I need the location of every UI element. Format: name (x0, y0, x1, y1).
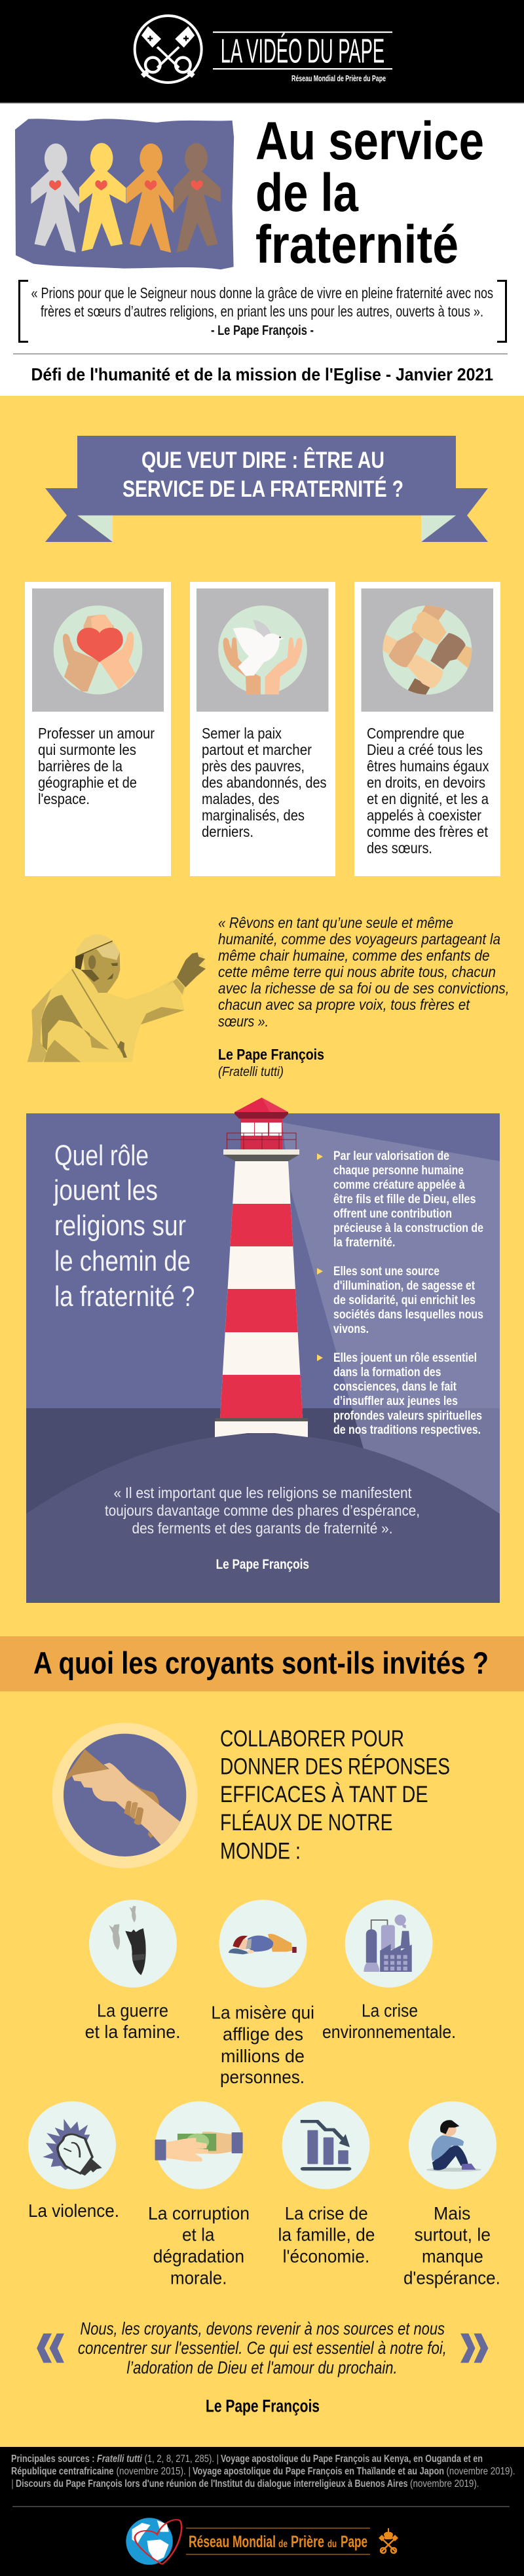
bullet three: Elles jouent un rôle essentiel (333, 1351, 477, 1365)
label: l'économie. (283, 2246, 369, 2266)
card text: partout et marcher (202, 741, 312, 758)
card text (367, 725, 489, 856)
section heading band (0, 1636, 524, 1691)
collaborate heading: COLLABORER POUR (220, 1726, 404, 1752)
icon: sleeping person (229, 1934, 297, 1954)
collaborate heading: FLÉAUX DE NOTRE (220, 1810, 393, 1836)
label (148, 2203, 250, 2288)
icon: money exchange (155, 2132, 243, 2161)
sources: (1, 2, 8, 271, 285). | (144, 2453, 219, 2465)
Pope quote: Le Pape François (218, 1046, 324, 1063)
card text: derniers. (202, 823, 253, 840)
card text: Comprendre que (367, 725, 464, 742)
Pope quote (218, 914, 510, 1079)
icon: bombs (109, 1906, 146, 1975)
icon: fist (43, 2119, 102, 2176)
title: fraternité (255, 215, 458, 275)
Pope quote: cette même terre qui nous abrite tous, chacun (218, 963, 496, 980)
bullet two: d'illumination, de sagesse et (333, 1279, 476, 1293)
card text: êtres humains égaux (367, 758, 489, 775)
card text (38, 725, 155, 807)
card text: des abandonnés, des (202, 774, 326, 791)
Pope quote: sœurs ». (218, 1013, 269, 1030)
bullet three: consciences, dans le fait (333, 1380, 457, 1394)
network name: Réseau Mondial (189, 2533, 276, 2551)
quote text (78, 2318, 447, 2377)
icon: factory (364, 1915, 412, 1972)
label: La crise (362, 2001, 418, 2021)
panel quote: « Il est important que les religions se manifestent (114, 1484, 412, 1501)
panel: card peace (190, 582, 335, 876)
label: manque (422, 2246, 483, 2266)
label: La guerre (97, 2001, 168, 2021)
label: dégradation (153, 2246, 244, 2266)
card text: comme des frères et (367, 823, 489, 840)
label: La violence. (28, 2201, 119, 2221)
sources: République centrafricaine (11, 2466, 114, 2477)
panel: card equality (354, 582, 500, 876)
card text: barrières de la (38, 758, 122, 775)
card text: et en dignité, et les a (367, 790, 489, 807)
prayer quote in brackets (20, 280, 506, 342)
Pope quote: même chair humaine, comme des enfants de (218, 947, 490, 964)
collaborate heading: MONDE : (220, 1839, 301, 1864)
quote text: concentrer sur l'essentiel. Ce qui est essentiel à notre foi, (78, 2338, 447, 2358)
label: et la (182, 2224, 215, 2244)
icon: quote chevrons (37, 2334, 488, 2363)
icon: hands with heart (54, 606, 142, 695)
label: surtout, le (415, 2224, 491, 2244)
bullet one: être fils et fille de Dieu, elles (333, 1193, 476, 1206)
sources: Voyage apostolique du Pape François en Thaïlande et au Japon (193, 2466, 444, 2477)
panel quote: toujours davantage comme des phares d’espérance, (105, 1502, 420, 1519)
title: de la (255, 163, 359, 223)
label: et la famine. (85, 2022, 181, 2042)
collaborate heading (220, 1726, 450, 1864)
logo wordmark: LA VIDÉO DU PAPE (221, 33, 384, 71)
network name: Pape (341, 2533, 367, 2551)
heading: role of religions: le chemin de (54, 1245, 191, 1277)
panel: card love (25, 582, 171, 876)
sources: Discours du Pape François lors d'une réunion de l'Institut du dialogue interreligieux à Buenos Aires (16, 2478, 408, 2489)
Pope quote: « Rêvons en tant qu’une seule et même (218, 914, 453, 931)
icon: falling chart (301, 2121, 351, 2170)
footer (0, 2447, 524, 2576)
label: afflige des (223, 2024, 303, 2045)
header band (0, 0, 524, 104)
panel quote: Le Pape François (216, 1557, 309, 1572)
panel: lighthouse (26, 1098, 500, 1603)
item: environmental crisis (322, 1900, 456, 2042)
prayer quote in brackets: - Le Pape François - (211, 323, 314, 338)
quote text: Nous, les croyants, devons revenir à nos sources et nous (80, 2318, 445, 2338)
bullet one: précieuse à la construction de (333, 1221, 483, 1235)
label (322, 2001, 456, 2042)
icon: linked hands (380, 603, 474, 697)
sources: (novembre 2019). (410, 2478, 479, 2489)
icon: sad person (426, 2120, 481, 2172)
heading: role of religions: religions sur (54, 1210, 186, 1242)
item: misery (211, 1900, 314, 2087)
bullet two: Elles sont une source (333, 1265, 440, 1278)
intro white section (0, 102, 524, 396)
collaborate heading: DONNER DES RÉPONSES (220, 1754, 450, 1780)
sources (11, 2453, 515, 2489)
card text: Semer la paix (202, 725, 282, 742)
bullet three: de nos traditions respectives. (333, 1423, 481, 1437)
sources: | (12, 2478, 13, 2489)
icon: hands with dove (218, 606, 307, 695)
ribbon banner (45, 436, 488, 542)
bullet three: profondes valeurs spirituelles (333, 1409, 482, 1423)
bullet one: Par leur valorisation de (333, 1149, 449, 1163)
bullet two: de solidarité, qui enrichit les (333, 1294, 476, 1307)
network name: du (328, 2539, 337, 2550)
title (255, 111, 484, 275)
label: personnes. (220, 2067, 305, 2087)
heading: role of religions: jouent les (52, 1174, 158, 1206)
label: La corruption (148, 2203, 250, 2223)
heading: role of religions: la fraternité ? (54, 1280, 195, 1313)
label (278, 2203, 375, 2266)
closing quote (37, 2318, 488, 2415)
label: Mais (434, 2203, 470, 2223)
label: La crise de (285, 2203, 368, 2223)
Pope quote: chacun avec sa propre voix, tous frères et (218, 996, 470, 1013)
item: lack of hope (403, 2102, 500, 2288)
attribution: Le Pape François (206, 2396, 320, 2415)
logo wordmark: Réseau Mondial de Prière du Pape (291, 74, 386, 83)
icon: globe and heart (126, 2518, 181, 2565)
sources: (novembre 2015). | (117, 2466, 191, 2477)
item: family and economy crisis (278, 2102, 375, 2266)
panel quote (105, 1484, 420, 1572)
sources: Fratelli tutti (97, 2453, 142, 2465)
Pope quote: humanité, comme des voyageurs partageant la (218, 931, 500, 948)
card text: appelés à coexister (367, 807, 481, 824)
bullet one (317, 1149, 483, 1250)
subtitle: Défi de l'humanité et de la mission de l'Eglise - Janvier 2021 (31, 364, 493, 384)
network name (186, 2528, 370, 2554)
icon: tiara and keys (379, 2528, 398, 2553)
card text: géographie et de (38, 774, 137, 791)
card text: près des pauvres, (202, 758, 305, 775)
label: la famille, de (278, 2224, 375, 2244)
label: morale. (170, 2268, 227, 2288)
bullet two: vivons. (333, 1322, 369, 1336)
card text: des sœurs. (367, 839, 432, 856)
quote text: l’adoration de Dieu et l'amour du prochain. (126, 2358, 398, 2377)
card text: marginalisés, des (202, 807, 305, 824)
illustration: Pope waving (28, 934, 206, 1062)
heading: role of religions (52, 1140, 195, 1313)
bullet one: offrent une contribution (333, 1207, 452, 1221)
bullet three: d’insuffler aux jeunes les (333, 1394, 458, 1408)
item: violence (28, 2102, 119, 2221)
ribbon banner: SERVICE DE LA FRATERNITÉ ? (122, 476, 403, 502)
icon: helping hands (52, 1723, 198, 1868)
icon: crossed keys logo (135, 16, 202, 83)
bullet one: chaque personne humaine (333, 1164, 464, 1178)
network name: Prière (291, 2533, 324, 2551)
bullet one: la fraternité. (333, 1236, 396, 1250)
label (211, 2003, 314, 2087)
bullet two (317, 1265, 483, 1336)
bullet one: comme créature appelée à (333, 1178, 465, 1192)
sources: Principales sources : (11, 2453, 94, 2465)
label: millions de (221, 2046, 305, 2066)
label: d'espérance. (403, 2268, 500, 2288)
card text: Professer un amour (38, 725, 155, 742)
card text: Dieu a créé tous les (367, 741, 483, 758)
bullet two: sociétés dans lesquelles nous (333, 1308, 483, 1322)
card text: malades, des (202, 790, 279, 807)
label: environnementale. (322, 2022, 456, 2042)
illustration: lighthouse (215, 1098, 308, 1437)
network name: de (278, 2539, 288, 2550)
label (85, 2001, 181, 2042)
card text: en droits, en devoirs (367, 774, 485, 791)
card text (202, 725, 326, 840)
label (403, 2203, 500, 2288)
collaborate heading: EFFICACES À TANT DE (220, 1782, 428, 1807)
item: corruption (148, 2102, 250, 2288)
Pope quote: (Fratelli tutti) (218, 1065, 284, 1079)
label: La misère qui (211, 2003, 314, 2023)
bullet three: dans la formation des (333, 1366, 441, 1379)
title: Au service (255, 111, 484, 171)
card text: l'espace. (38, 790, 90, 807)
heading: role of religions: Quel rôle (54, 1140, 149, 1172)
panel quote: des ferments et des garants de fraternité ». (132, 1520, 393, 1537)
ribbon banner: QUE VEUT DIRE : ÊTRE AU (141, 447, 384, 473)
illustration: paper people on flag (15, 119, 234, 269)
item: war and famine (85, 1900, 181, 2042)
card text: qui surmonte les (38, 741, 136, 758)
bullet three (317, 1351, 482, 1437)
logo wordmark (213, 31, 392, 83)
